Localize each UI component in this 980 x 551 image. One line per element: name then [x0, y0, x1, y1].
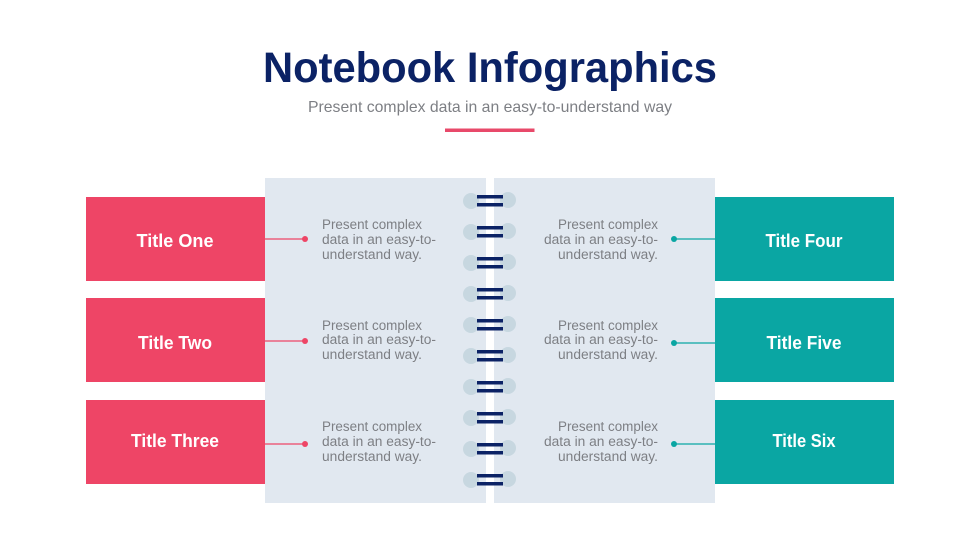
panel: title five: understand way. [558, 347, 658, 362]
panel: title six [544, 400, 894, 484]
panel: title one: understand way. [322, 247, 422, 262]
panel: title three [86, 400, 436, 484]
ring 9 [463, 440, 516, 457]
panel: title three: data in an easy-to- [322, 434, 436, 449]
ring 6 [463, 347, 516, 364]
panel: title four [544, 197, 894, 281]
left page [265, 178, 486, 503]
panel: title two: Title Two [138, 333, 212, 353]
ring 5 [463, 316, 516, 333]
subtitle: Present complex data in an easy-to-understand way [308, 99, 672, 116]
title: Notebook Infographics [263, 44, 717, 92]
panel: title one: Title One [136, 231, 214, 251]
panel: title three: Title Three [131, 431, 219, 451]
panel: title five: Present complex [558, 318, 658, 333]
panel: title two: Present complex [322, 318, 422, 333]
ring 8 [463, 409, 516, 426]
panel: title four: Present complex [558, 217, 658, 232]
ring 4 [463, 285, 516, 302]
panel: title six: Title Six [772, 431, 836, 451]
title underline [445, 128, 534, 132]
ring 3 [463, 254, 516, 271]
notebook [265, 178, 715, 503]
panel: title two [86, 298, 436, 382]
ring 2 [463, 223, 516, 240]
panel: title four: Title Four [766, 231, 842, 251]
panel: title two: data in an easy-to- [322, 332, 436, 347]
panel: title one [86, 197, 436, 281]
panel: title six: data in an easy-to- [544, 434, 658, 449]
panel: title three: understand way. [322, 449, 422, 464]
panel: title five: Title Five [766, 333, 842, 353]
ring 1 [463, 192, 516, 209]
ring 10 [463, 471, 516, 488]
panel: title five [544, 298, 894, 382]
right page [494, 178, 715, 503]
panel: title six: understand way. [558, 449, 658, 464]
panel: title one: Present complex [322, 217, 422, 232]
panel: title five: data in an easy-to- [544, 332, 658, 347]
panel: title four: understand way. [558, 247, 658, 262]
panel: title six: Present complex [558, 419, 658, 434]
panel: title four: data in an easy-to- [544, 232, 658, 247]
panel: title two: understand way. [322, 347, 422, 362]
spiral rings [463, 192, 516, 488]
ring 7 [463, 378, 516, 395]
panel: title three: Present complex [322, 419, 422, 434]
panel: title one: data in an easy-to- [322, 232, 436, 247]
